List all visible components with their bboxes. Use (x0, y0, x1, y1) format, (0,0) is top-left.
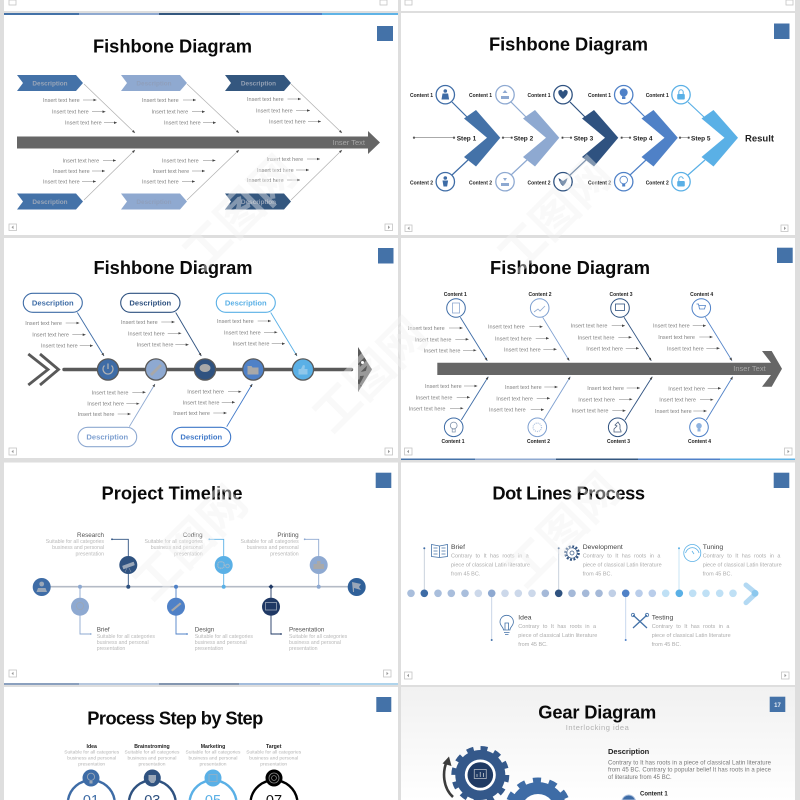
content labels: Content 2 (469, 180, 492, 186)
insert text rows: Insert text here (128, 331, 165, 337)
insert text rows: Insert text here (43, 98, 80, 104)
insert text rows: Insert text here (416, 395, 452, 401)
insert text rows: Insert text here (142, 98, 179, 104)
description text (608, 747, 772, 781)
insert text rows: Insert text here (247, 178, 284, 184)
content labels: Content 3 (607, 439, 630, 445)
subtitle: Interlocking idea (566, 723, 630, 732)
gear 1 (454, 748, 507, 800)
step labels: presentation (260, 761, 287, 767)
insert text rows: Insert text here (233, 342, 269, 348)
title: Fishbone Diagram (490, 257, 650, 278)
description chevrons top: Description (136, 80, 172, 88)
number square (777, 248, 793, 263)
insert text rows: Insert text here (183, 400, 219, 406)
panel: fishbone with content icons (401, 238, 795, 460)
number badge: 17 (774, 703, 781, 709)
diagonal bones (84, 84, 342, 200)
vertical connectors (423, 547, 680, 641)
insert text rows: Insert text here (217, 319, 254, 325)
icon: gear (565, 546, 579, 560)
insert text rows: Insert text here (415, 337, 451, 343)
insert text rows: Insert text here (408, 326, 445, 332)
insert text rows: Insert text here (257, 168, 294, 174)
panel: dot lines process (401, 462, 795, 685)
spine arrow: Inser Text (733, 364, 767, 373)
insert text rows: Insert text here (409, 406, 445, 412)
lower timeline text: Design (195, 626, 215, 634)
insert text rows: Insert text here (173, 411, 210, 417)
insert text rows: Insert text here (247, 97, 284, 103)
lower step text: Contrary to It has roots in a (652, 624, 730, 630)
insert text rows: Insert text here (668, 386, 705, 392)
step labels: Suitable for all categories (64, 750, 120, 756)
bones (460, 317, 733, 420)
insert text rows: Insert text here (78, 412, 114, 418)
insert text rows: Insert text here (578, 397, 615, 403)
gear 2 (509, 780, 567, 800)
upper step text: Development (583, 544, 623, 551)
lower timeline text: Suitable for all categories (289, 634, 348, 640)
insert text rows: Insert text here (571, 324, 607, 330)
upper step text: Tuning (703, 544, 723, 551)
step labels: Suitable for all categories (186, 750, 241, 756)
end chevron (746, 585, 758, 603)
upper timeline text: business and personal (247, 545, 299, 551)
lower timeline text: business and personal (97, 640, 149, 646)
insert text rows: Insert text here (164, 121, 201, 127)
watermarks: 工图网 (123, 476, 257, 610)
content labels: Content 4 (688, 439, 711, 445)
step labels: Result (745, 133, 775, 144)
title: Fishbone Diagram (489, 34, 648, 54)
upper timeline text: Suitable for all categories (46, 539, 104, 545)
upper step text: Contrary to It has roots in a (583, 554, 661, 560)
lower timeline text: business and personal (289, 640, 341, 646)
top icon circles (436, 86, 690, 104)
step icons (82, 770, 282, 786)
insert text rows: Insert text here (667, 346, 704, 352)
title: Dot Lines Process (492, 482, 645, 503)
insert text rows: Insert text here (504, 347, 541, 353)
content labels: Content 1 (444, 292, 467, 298)
step labels: business and personal (67, 755, 116, 761)
insert text rows: Insert text here (505, 385, 542, 391)
content labels: Content 1 (588, 93, 611, 99)
spine arrow (17, 131, 380, 154)
title: Fishbone Diagram (94, 257, 252, 278)
lower timeline text: presentation (97, 646, 125, 652)
insert text rows: Insert text here (496, 396, 533, 402)
description chevrons bottom: Description (241, 199, 276, 206)
upper timeline text: Suitable for all categories (144, 539, 203, 545)
panel: fishbone steps (401, 13, 795, 235)
insert text rows: Insert text here (658, 335, 695, 341)
number square (376, 697, 391, 712)
step rings (68, 780, 297, 800)
slide nav buttons (9, 224, 392, 230)
step labels: presentation (78, 761, 105, 767)
upper step text: from 45 BC. (451, 572, 481, 578)
lower timeline text: business and personal (195, 640, 247, 646)
insert text rows: Insert text here (425, 384, 462, 390)
lower timeline text: Suitable for all categories (195, 634, 253, 640)
lower step text: Testing (652, 614, 673, 621)
upper step text: Contrary to It has roots in a (703, 554, 781, 560)
insert text rows: Insert text here (32, 333, 69, 339)
insert text rows: Insert text here (25, 321, 62, 327)
step arrows (413, 137, 690, 139)
description chevrons bottom (17, 194, 291, 210)
upper timeline text: business and personal (151, 545, 203, 551)
number square (774, 473, 789, 488)
step labels: Step 4 (633, 135, 653, 142)
slide nav buttons (404, 672, 789, 679)
step chevrons (464, 110, 738, 166)
insert text rows: Insert text here (41, 344, 78, 350)
title: Fishbone Diagram (93, 36, 252, 57)
content labels: Content 3 (609, 292, 633, 298)
icon: tools (631, 613, 649, 628)
insert text rows (43, 97, 321, 186)
insert text rows: Insert text here (224, 330, 261, 336)
insert text rows: Insert text here (655, 409, 692, 415)
slide nav buttons (9, 448, 392, 455)
upper timeline text: Printing (277, 532, 299, 539)
lower step text: Contrary to It has roots in a (518, 624, 597, 630)
icon: bulb (500, 615, 513, 634)
fish head (358, 347, 372, 392)
insert text rows: Insert text here (659, 398, 696, 404)
description pills: Description (129, 298, 172, 308)
step labels: Target (266, 744, 282, 750)
upper timeline text: Suitable for all categories (240, 539, 299, 545)
upper step text: piece of classical Latin literature (583, 563, 662, 569)
curved arrow (442, 756, 453, 797)
insert text rows: Insert text here (142, 180, 179, 186)
insert text rows: Insert text here (489, 408, 526, 414)
connectors (80, 538, 319, 635)
panel: fishbone with icon nodes (4, 238, 398, 458)
step labels: Idea (87, 744, 97, 750)
content labels: Content 2 (527, 439, 550, 445)
fish tail (28, 354, 58, 385)
top content circles (447, 299, 711, 317)
slide nav buttons (9, 670, 391, 677)
watermarks: 工图网 (173, 146, 307, 280)
description pills (23, 293, 275, 447)
content labels: Content 1 (646, 93, 669, 99)
insert text rows: Insert text here (152, 169, 189, 175)
watermarks: 工图网 (496, 463, 630, 597)
upper step text: Contrary to It has roots in a (451, 554, 530, 560)
insert text rows: Insert text here (92, 390, 128, 396)
lower step text (518, 614, 731, 648)
number square (377, 26, 393, 41)
insert text rows: Insert text here (572, 409, 608, 415)
watermarks (123, 146, 630, 610)
insert text rows: Insert text here (578, 335, 614, 341)
content labels: Content 4 (690, 292, 713, 298)
icon: gauge (684, 544, 701, 562)
insert text rows: Insert text here (495, 336, 532, 342)
step labels: Step 2 (514, 135, 534, 142)
content labels: Content 2 (646, 180, 669, 186)
step labels: Step 5 (691, 135, 711, 142)
previous slides cut off at top (4, 0, 795, 11)
upper step text: from 45 BC. (703, 572, 733, 578)
step labels: presentation (139, 761, 166, 767)
description chevrons bottom: Description (136, 199, 172, 206)
insert text rows: Insert text here (587, 386, 624, 392)
title: Gear Diagram (538, 701, 656, 722)
insert text rows: Insert text here (137, 343, 173, 349)
insert text rows (25, 319, 285, 418)
timeline icon circles (33, 556, 366, 616)
description pills: Description (225, 298, 267, 308)
step labels: Suitable for all categories (246, 750, 302, 756)
watermarks: 工图网 (488, 148, 622, 282)
spine arrow: Inser Text (333, 138, 366, 147)
step labels: Brainstroming (134, 744, 170, 750)
step labels: business and personal (128, 755, 176, 761)
number square (376, 473, 391, 488)
description chevrons top: Description (241, 80, 276, 88)
axis dots (78, 584, 321, 589)
upper timeline text: Research (77, 532, 104, 539)
panel: gear diagram (401, 687, 795, 800)
description chevrons top (17, 75, 291, 91)
content labels (441, 292, 713, 445)
description text: Contrary to It has roots in a piece of classical Latin literature (608, 760, 772, 766)
upper step text (451, 544, 782, 578)
lower timeline text: Suitable for all categories (97, 634, 155, 640)
description pills: Description (180, 433, 223, 442)
panel: project timeline (4, 462, 398, 685)
content labels: Content 2 (588, 180, 611, 186)
step labels: business and personal (189, 755, 237, 761)
description chevrons top: Description (32, 80, 68, 88)
bones (77, 312, 297, 427)
lower timeline text: presentation (195, 646, 223, 652)
step labels: Step 3 (574, 135, 594, 142)
insert text rows: Insert text here (43, 180, 80, 186)
number square (774, 24, 790, 39)
content labels: Content 1 (441, 439, 465, 445)
content labels: Content 1 (528, 93, 551, 99)
step numbers (83, 793, 282, 800)
content item (622, 792, 668, 800)
content labels: Content 1 (469, 93, 492, 99)
upper timeline text (46, 532, 299, 557)
insert text rows: Insert text here (53, 169, 90, 175)
insert text rows: Insert text here (488, 325, 525, 331)
insert text rows: Insert text here (266, 157, 303, 163)
upper timeline text: presentation (75, 551, 104, 557)
insert text rows: Insert text here (152, 110, 188, 116)
insert text rows: Insert text here (121, 320, 158, 326)
lower step text: from 45 BC. (518, 642, 548, 648)
upper timeline text: presentation (270, 551, 299, 557)
step labels (457, 133, 775, 144)
upper timeline text: presentation (174, 551, 203, 557)
step labels: business and personal (249, 755, 298, 761)
insert text rows: Insert text here (52, 110, 89, 116)
insert text rows: Insert text here (586, 346, 623, 352)
description text: of literature from 45 BC. (608, 775, 672, 781)
step labels: presentation (200, 761, 227, 767)
lower step text: from 45 BC. (652, 642, 682, 648)
title: Project Timeline (102, 482, 242, 503)
lower step text: Idea (518, 614, 532, 621)
insert text rows: Insert text here (162, 158, 199, 164)
bottom content circles (444, 418, 708, 437)
insert text rows: Insert text here (269, 120, 306, 126)
panel: fishbone chevrons (4, 13, 398, 235)
insert text rows: Insert text here (256, 108, 293, 114)
step labels: Suitable for all categories (125, 750, 180, 756)
watermarks: 工图网 (303, 308, 437, 442)
bottom icon circles (436, 172, 690, 191)
description pills: Description (32, 298, 74, 308)
insert text rows: Insert text here (65, 121, 102, 127)
panel: process step by step (4, 687, 398, 800)
upper step text: piece of classical Latin literature (703, 563, 782, 569)
description text: from 45 BC. Contrary to popular belief It has roots in a piece (608, 768, 772, 774)
insert text rows: Insert text here (653, 324, 690, 330)
upper timeline text: Coding (183, 532, 203, 539)
content labels: Content 2 (410, 180, 433, 186)
upper step text: piece of classical Latin literature (451, 563, 530, 569)
description chevrons bottom: Description (32, 199, 68, 206)
content labels: Content 1 (410, 93, 433, 99)
insert text rows: Insert text here (187, 390, 224, 396)
content labels (410, 93, 669, 186)
number badge (770, 697, 785, 712)
description text: Description (608, 747, 650, 756)
content item: Content 1 (640, 792, 668, 798)
description pills: Description (86, 433, 129, 442)
connector lines to circles (452, 102, 705, 175)
dot row (407, 590, 737, 597)
timeline axis (50, 586, 348, 588)
step labels: Step 1 (457, 135, 477, 142)
insert text rows: Insert text here (87, 402, 124, 408)
spine arrow (437, 351, 782, 387)
insert text rows (408, 324, 721, 415)
lower step text: piece of classical Latin literature (652, 633, 731, 639)
icon: book (432, 544, 448, 558)
spine icon nodes (97, 359, 314, 380)
lower timeline text: Brief (97, 626, 110, 634)
step labels (64, 744, 302, 767)
lower step text: piece of classical Latin literature (518, 633, 597, 639)
title: Process Step by Step (87, 707, 263, 728)
lower timeline text: presentation (289, 646, 318, 652)
upper timeline text: business and personal (52, 545, 104, 551)
insert text rows: Insert text here (424, 348, 460, 354)
step labels: Marketing (201, 744, 225, 750)
lower timeline text (97, 626, 348, 652)
upper step text: Brief (451, 544, 465, 551)
insert text rows: Insert text here (62, 158, 99, 164)
content labels: Content 2 (528, 180, 551, 186)
spine (64, 368, 352, 371)
lower timeline text: Presentation (289, 626, 325, 634)
slide nav buttons (404, 448, 792, 455)
number square (378, 248, 394, 264)
slide nav buttons (405, 225, 788, 232)
content labels: Content 2 (528, 292, 552, 298)
upper step text: from 45 BC. (583, 572, 613, 578)
